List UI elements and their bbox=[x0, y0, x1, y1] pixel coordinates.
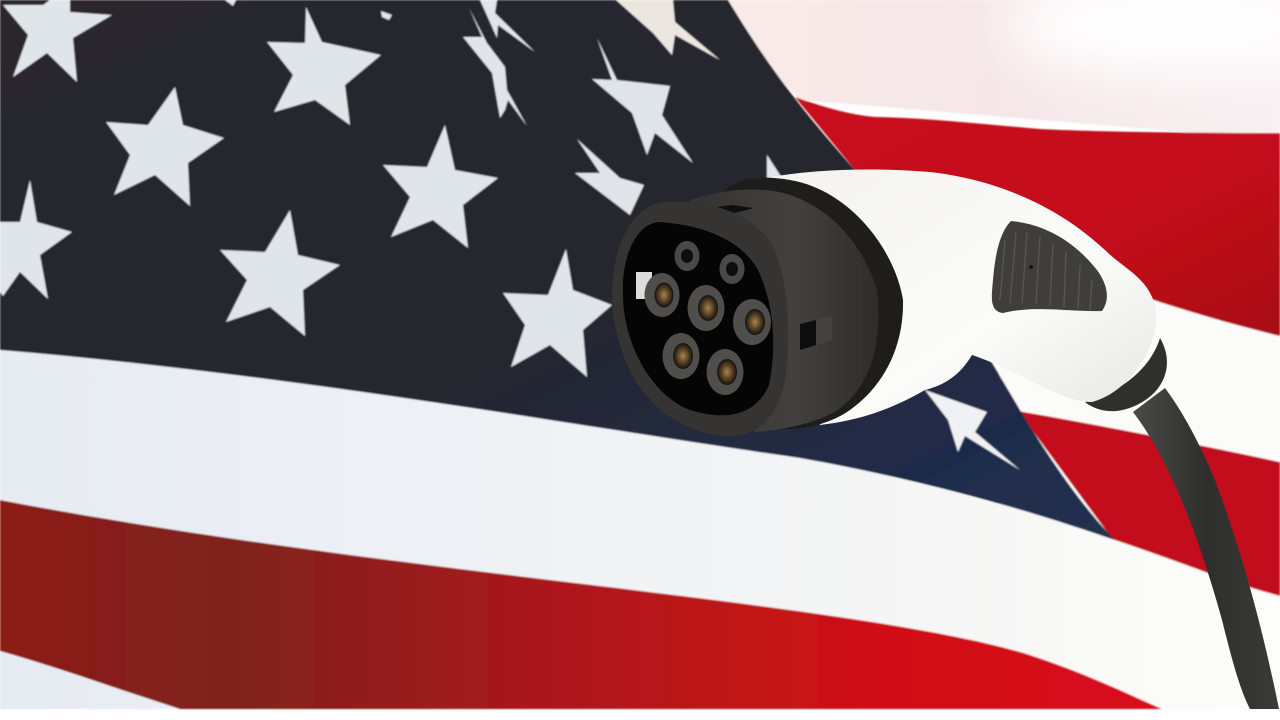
plug: connector barrel bbox=[690, 190, 878, 432]
plug bbox=[612, 170, 1279, 709]
plug: front rim bbox=[612, 202, 788, 436]
plug: barrel side latch hole bbox=[800, 316, 832, 350]
plug: guide notch bbox=[636, 272, 652, 299]
plug: socket cavity bbox=[623, 222, 773, 415]
flag: upper right red stripe bbox=[795, 97, 1280, 336]
plug: grip pad bbox=[992, 221, 1107, 313]
plug: connector collar bbox=[700, 178, 903, 429]
flag: lower red stripe bbox=[0, 500, 1162, 709]
flag: top white stripe bbox=[700, 0, 1280, 140]
flag: middle right red stripe bbox=[1018, 411, 1280, 596]
flag: navy canton bbox=[0, 0, 1115, 540]
plug: cable bbox=[1133, 388, 1279, 709]
plug: power pins bbox=[644, 273, 771, 395]
plug: signal pins bbox=[674, 241, 744, 284]
plug: strain relief bbox=[1085, 338, 1167, 411]
flag: stars bbox=[0, 0, 1020, 470]
flag: highlight on top white stripe bbox=[1000, 0, 1280, 75]
flag: large white stripe bbox=[0, 350, 1280, 709]
plug: top latch hole bbox=[709, 205, 754, 213]
flag: base white area on the right bbox=[1000, 300, 1280, 709]
plug: white handle bbox=[765, 170, 1156, 425]
